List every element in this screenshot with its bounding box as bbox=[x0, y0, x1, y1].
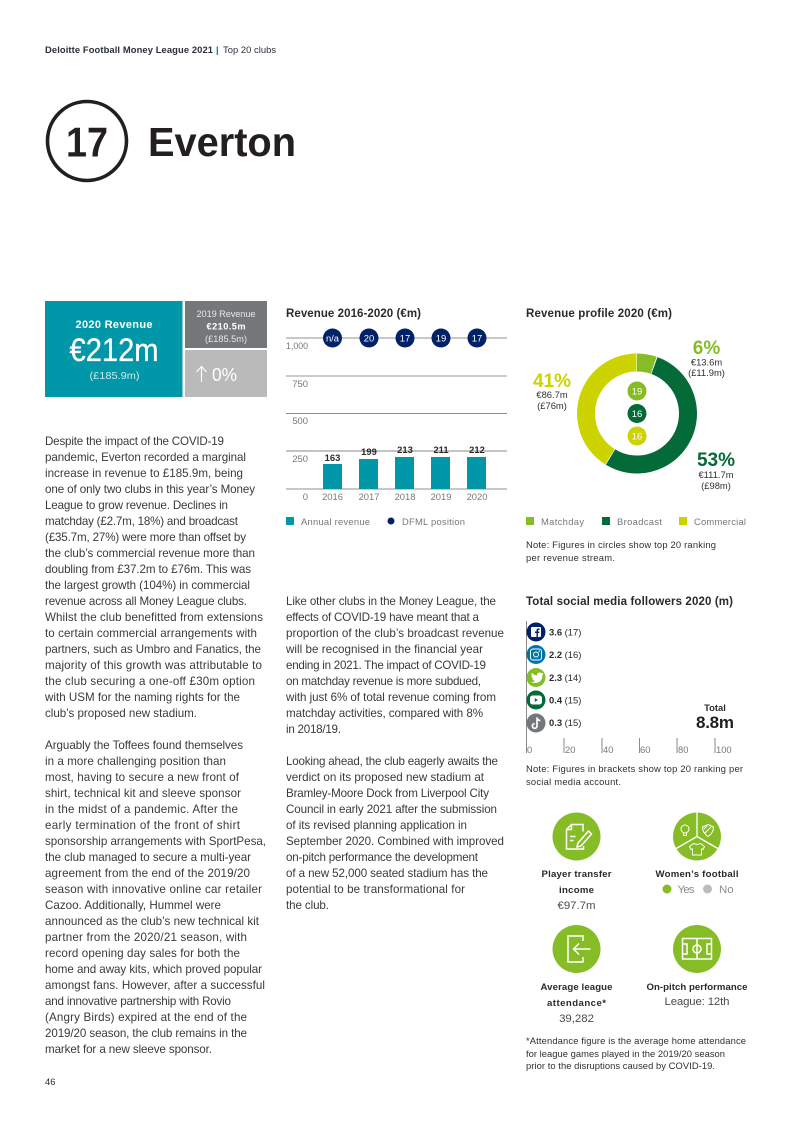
legend: revenue profile: Commercial bbox=[694, 516, 746, 527]
text block: second column: Looking ahead, the club eagerly awaits the bbox=[286, 755, 498, 768]
text block: intro column: agreement from the end of the 2019/20 bbox=[45, 867, 250, 880]
axis labels: 100 bbox=[716, 744, 732, 755]
text block: intro column: club’s proposed new stadium. bbox=[45, 707, 197, 720]
panel: 2019 revenue: €210.5m bbox=[206, 322, 246, 332]
icon: instagram bbox=[526, 645, 546, 664]
icon: document and pen bbox=[552, 812, 600, 860]
bar values: 213 bbox=[397, 444, 413, 455]
icon: tiktok bbox=[526, 714, 546, 732]
total followers: 8.8m bbox=[696, 713, 734, 732]
note: revenue profile: Note: Figures in circles show top 20 ranking bbox=[526, 539, 716, 550]
title: Everton bbox=[148, 119, 296, 165]
stat: on-pitch performance: On-pitch performance bbox=[646, 982, 748, 993]
chart: social media followers bbox=[526, 621, 732, 755]
donut label: broadcast bbox=[697, 450, 735, 491]
rank badge: 17 bbox=[66, 118, 108, 166]
text block: intro column: sponsorship arrangements with SportPesa, bbox=[45, 835, 266, 848]
stat: player transfer income: Player transfer bbox=[542, 869, 612, 880]
rank badge bbox=[48, 102, 126, 180]
text block: second column: Bramley-Moore Dock from Liverpool City bbox=[286, 787, 489, 800]
axis labels: 40 bbox=[603, 744, 613, 755]
x-axis labels: 2017 bbox=[359, 491, 379, 502]
donut label: commercial: €86.7m bbox=[536, 389, 568, 400]
chart heading: revenue profile: Revenue profile 2020 (€m) bbox=[526, 308, 672, 320]
text block: second column: September 2020. Combined with improved bbox=[286, 835, 504, 848]
note: revenue profile: per revenue stream. bbox=[526, 552, 615, 563]
panel: 2019 revenue: (£185.5m) bbox=[205, 334, 247, 344]
donut chart: revenue profile: 16 bbox=[632, 408, 642, 419]
bar values: 212 bbox=[469, 444, 485, 455]
y-axis labels: 1,000 bbox=[286, 340, 308, 351]
stat: average league attendance bbox=[540, 925, 612, 1025]
text block: second column: Council in early 2021 after the submission bbox=[286, 803, 497, 816]
bar values bbox=[325, 444, 485, 463]
text block: second column: potential to be transformational for bbox=[286, 883, 465, 896]
text block: second column: will be recognised in the financial year bbox=[285, 643, 483, 656]
axis labels: 0 bbox=[527, 744, 532, 755]
text block: intro column: the club managed to secure a multi-year bbox=[45, 851, 251, 864]
donut label: matchday bbox=[688, 338, 725, 378]
x-axis labels: 2016 bbox=[322, 491, 343, 502]
note: social media bbox=[526, 763, 743, 787]
follower values: 2.3 (14) bbox=[549, 672, 581, 683]
axis labels bbox=[527, 744, 732, 755]
stat: player transfer income bbox=[542, 812, 612, 912]
bar values: 199 bbox=[361, 446, 377, 457]
page number: 46 bbox=[45, 1076, 55, 1087]
text block: intro column: (£35.7m, 27%) were more than offset by bbox=[45, 531, 246, 544]
stream rank circles bbox=[628, 382, 646, 400]
panel: 2020 revenue: 2020 Revenue bbox=[76, 319, 152, 331]
follower values bbox=[549, 626, 581, 728]
text block: intro column: the largest growth (104%) in commercial bbox=[45, 579, 250, 592]
bar chart: revenue 2016-2020 bbox=[286, 328, 507, 502]
axis labels: 60 bbox=[640, 744, 650, 755]
stat: women's football: Women’s football bbox=[656, 869, 738, 880]
y-axis labels bbox=[286, 340, 308, 502]
text block: second column: Like other clubs in the Money League, the bbox=[286, 595, 496, 608]
panel: 2019 revenue: 2019 Revenue bbox=[196, 309, 256, 319]
footnote: attendance bbox=[526, 1035, 746, 1071]
text block: intro column: record opening day sales for both the bbox=[45, 947, 240, 960]
follower values: 0.4 (15) bbox=[549, 694, 581, 706]
note: social media: Note: Figures in brackets show top 20 ranking per bbox=[526, 763, 743, 774]
note: social media: social media account. bbox=[526, 776, 621, 787]
text block: second column bbox=[285, 595, 504, 912]
x-axis labels bbox=[322, 491, 487, 502]
text block: intro column: most, having to secure a new front of bbox=[45, 771, 240, 784]
legend: revenue profile: Matchday bbox=[541, 516, 584, 527]
text block: second column: the club. bbox=[286, 899, 329, 912]
text block: intro column: Arguably the Toffees found themselves bbox=[45, 739, 243, 752]
text block: intro column: home and away kits, which proved popular bbox=[45, 963, 262, 976]
legend: revenue profile: Broadcast bbox=[617, 516, 662, 527]
text block: intro column: in the midst of a pandemic. After the bbox=[45, 803, 238, 816]
icon: youtube bbox=[526, 690, 546, 710]
donut chart: revenue profile: 16 bbox=[632, 430, 642, 442]
text block: second column: of a new 52,000 seated stadium has the bbox=[286, 867, 488, 880]
icon: entrance door bbox=[552, 925, 600, 973]
legend: revenue chart: Annual revenue bbox=[301, 516, 370, 527]
DFML position markers bbox=[323, 328, 486, 348]
stat: on-pitch performance: League: 12th bbox=[664, 996, 730, 1008]
text block: intro column: in a more challenging position than bbox=[45, 755, 226, 768]
footnote: attendance: for league games played in the 2019/20 season bbox=[526, 1048, 725, 1059]
text block: intro column bbox=[44, 435, 266, 1056]
text block: intro column: League to grow revenue. Declines in bbox=[45, 499, 228, 512]
x-axis labels: 2020 bbox=[467, 491, 487, 502]
text block: intro column: doubling from £37.2m to £76m. This was bbox=[45, 563, 251, 576]
icon: pitch bbox=[673, 925, 721, 973]
DFML position markers: n/a bbox=[326, 332, 340, 344]
DFML position markers: 20 bbox=[364, 332, 374, 344]
page header: Top 20 clubs bbox=[223, 44, 276, 55]
y-axis labels: 500 bbox=[292, 415, 308, 426]
legend: revenue profile bbox=[526, 516, 746, 527]
axis bbox=[526, 621, 715, 753]
panel: 2020 revenue: €212m bbox=[70, 332, 158, 368]
text block: intro column: amongst fans. However, after a successful bbox=[45, 979, 265, 992]
donut chart: revenue profile: 19 bbox=[632, 386, 642, 396]
text block: intro column: the club’s commercial revenue more than bbox=[45, 547, 255, 560]
text block: intro column: partners, such as Umbro and Fanatics, the bbox=[45, 643, 261, 656]
bars bbox=[323, 457, 486, 489]
donut label: commercial: 41% bbox=[533, 371, 571, 392]
text block: intro column: season with innovative online car retailer bbox=[45, 883, 262, 896]
stat: women's football bbox=[656, 812, 738, 896]
text block: intro column: shirt, technical kit and sleeve sponsor bbox=[45, 787, 241, 800]
x-axis labels: 2019 bbox=[431, 491, 451, 502]
DFML position markers: 17 bbox=[472, 332, 482, 344]
panel: revenue change bbox=[185, 350, 267, 397]
footnote: attendance: prior to the disruptions caused by COVID-19. bbox=[526, 1060, 715, 1071]
donut label: matchday: 6% bbox=[693, 338, 720, 359]
text block: second column: on matchday revenue is more subdued, bbox=[286, 675, 481, 688]
bar values: 163 bbox=[325, 452, 340, 463]
follower values: 3.6 (17) bbox=[549, 626, 581, 638]
text block: intro column: matchday (£2.7m, 18%) and broadcast bbox=[45, 515, 239, 528]
legend: revenue chart: DFML position bbox=[402, 516, 465, 527]
panel: 2020 revenue bbox=[45, 301, 182, 397]
axis labels: 80 bbox=[678, 744, 688, 755]
total followers: Total bbox=[704, 702, 726, 713]
text block: intro column: one of only two clubs in this year’s Money bbox=[45, 483, 255, 496]
stat: average league attendance: 39,282 bbox=[559, 1013, 594, 1025]
panel: revenue change: 0% bbox=[212, 365, 237, 385]
stat: player transfer income: income bbox=[559, 885, 594, 896]
donut label: broadcast: €111.7m bbox=[698, 469, 734, 480]
text block: second column: ending in 2021. The impact of COVID-19 bbox=[286, 659, 486, 672]
text block: intro column: with USM for the naming rights for the bbox=[44, 691, 240, 704]
text block: intro column: and innovative partnership with Rovio bbox=[45, 995, 231, 1008]
total followers bbox=[696, 702, 734, 732]
text block: intro column: revenue across all Money League clubs. bbox=[45, 595, 247, 608]
text block: intro column: increase in revenue to £185.9m, being bbox=[45, 467, 243, 480]
footnote: attendance: *Attendance figure is the average home attendance bbox=[526, 1035, 746, 1046]
donut label: commercial: (£76m) bbox=[537, 400, 567, 411]
text block: second column: matchday activities, compared with 8% bbox=[286, 707, 483, 720]
axis labels: 20 bbox=[565, 744, 575, 755]
page header: Deloitte Football Money League 2021 bbox=[45, 44, 213, 55]
text block: intro column: announced as the club’s new technical kit bbox=[45, 915, 260, 928]
icon: women's football segments bbox=[673, 812, 721, 860]
DFML position markers: 19 bbox=[436, 332, 446, 344]
icon: facebook bbox=[526, 622, 546, 642]
panel: 2020 revenue: (£185.9m) bbox=[90, 370, 140, 382]
donut label: matchday: (£11.9m) bbox=[688, 367, 725, 378]
DFML position markers: 17 bbox=[400, 332, 410, 344]
follower values: 2.2 (16) bbox=[549, 649, 581, 660]
text block: intro column: (Angry Birds) expired at the end of the bbox=[45, 1011, 247, 1024]
panel: 2019 revenue bbox=[185, 301, 267, 348]
text block: intro column: majority of this growth was attributable to bbox=[45, 659, 262, 672]
y-axis labels: 0 bbox=[303, 491, 308, 502]
y-axis labels: 250 bbox=[292, 453, 308, 464]
text block: intro column: Cazoo. Additionally, Hummel were bbox=[45, 899, 221, 912]
text block: intro column: Whilst the club benefitted from extensions bbox=[45, 611, 263, 624]
text block: second column: in 2018/19. bbox=[286, 723, 341, 736]
stat: women's football: Yes bbox=[678, 884, 695, 896]
text block: intro column: to certain commercial arrangements with bbox=[45, 627, 257, 640]
donut label: broadcast: (£98m) bbox=[701, 480, 731, 491]
text block: intro column: pandemic, Everton recorded a marginal bbox=[45, 451, 246, 464]
text block: second column: verdict on its proposed new stadium at bbox=[286, 771, 485, 784]
text block: intro column: the club securing a one-off £30m option bbox=[45, 675, 255, 688]
donut label: matchday: €13.6m bbox=[691, 356, 722, 368]
donut chart: revenue profile bbox=[567, 343, 707, 484]
text block: second column: on-pitch performance the development bbox=[286, 851, 479, 864]
stat: on-pitch performance bbox=[646, 925, 748, 1008]
stat: women's football: No bbox=[719, 884, 734, 896]
page header: | bbox=[216, 44, 219, 55]
icon: twitter bbox=[526, 668, 546, 687]
text block: second column: proportion of the club’s broadcast revenue bbox=[286, 627, 504, 640]
text block: intro column: market for a new sleeve sponsor. bbox=[45, 1043, 212, 1056]
donut label: broadcast: 53% bbox=[697, 450, 735, 471]
text block: second column: effects of COVID-19 have meant that a bbox=[286, 611, 480, 624]
legend: revenue chart bbox=[286, 516, 465, 527]
text block: second column: with just 6% of total revenue coming from bbox=[285, 691, 496, 704]
text block: intro column: early termination of the front of shirt bbox=[45, 819, 241, 832]
text block: intro column: partner from the 2020/21 season, with bbox=[45, 931, 247, 944]
stat: average league attendance: Average league bbox=[540, 982, 612, 993]
follower values: 0.3 (15) bbox=[549, 717, 581, 728]
note: revenue profile bbox=[526, 539, 716, 563]
y-axis labels: 750 bbox=[292, 378, 308, 389]
stat: player transfer income: €97.7m bbox=[558, 900, 596, 912]
chart heading: social media: Total social media followers 2020 (m) bbox=[526, 596, 733, 608]
donut label: commercial bbox=[533, 371, 571, 411]
text block: intro column: Despite the impact of the COVID-19 bbox=[45, 435, 224, 448]
chart heading: revenue 2016-2020: Revenue 2016-2020 (€m) bbox=[286, 308, 421, 320]
x-axis labels: 2018 bbox=[395, 491, 415, 502]
bar values: 211 bbox=[433, 444, 449, 455]
text block: intro column: 2019/20 season, the club remains in the bbox=[45, 1027, 247, 1040]
text block: second column: of its revised planning application in bbox=[286, 819, 467, 832]
stat: average league attendance: attendance* bbox=[547, 998, 606, 1009]
